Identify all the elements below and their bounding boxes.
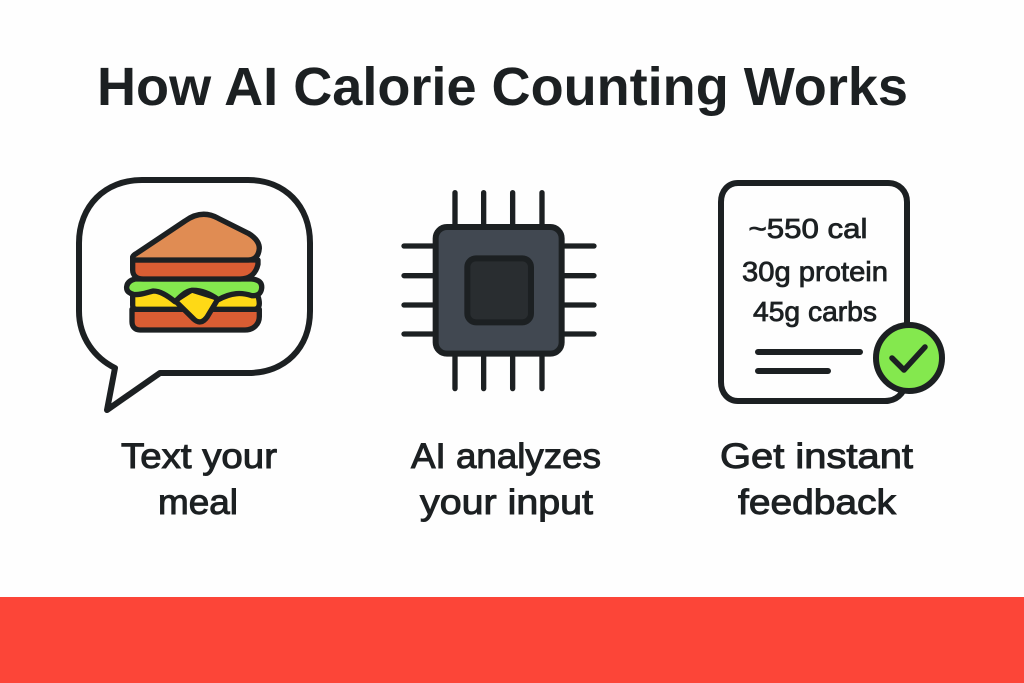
title: How AI Calorie Counting Works xyxy=(97,58,908,117)
nutrition text: 30g protein xyxy=(742,256,888,287)
step 3 label: Get instant xyxy=(720,436,913,476)
cheese drip xyxy=(175,290,218,322)
cheese xyxy=(133,287,259,309)
chip body xyxy=(436,227,562,354)
icon: AI chip xyxy=(404,193,594,389)
step 2 label: your input xyxy=(420,482,593,522)
nutrition text: 45g carbs xyxy=(753,296,877,327)
step 3: instant feedback xyxy=(720,183,942,522)
step 2: AI analyzes xyxy=(404,193,601,522)
chip pins xyxy=(404,193,594,389)
icon: speech bubble xyxy=(79,180,310,410)
document lines xyxy=(758,352,860,371)
red footer band xyxy=(0,597,1024,683)
bottom bread xyxy=(132,309,259,330)
step 1 label: Text your xyxy=(121,436,277,476)
step 2 label: AI analyzes xyxy=(411,436,601,476)
chip core xyxy=(467,258,531,322)
icon: results document xyxy=(721,183,907,401)
middle bread xyxy=(133,260,258,279)
lettuce xyxy=(127,279,262,302)
icon: sandwich xyxy=(127,214,262,330)
nutrition text: ~550 cal xyxy=(748,213,868,244)
step 1 label: meal xyxy=(158,482,238,522)
icon: green check badge xyxy=(876,325,942,391)
step 1: text your meal xyxy=(79,180,310,522)
top bread slice xyxy=(133,214,259,260)
nutrition text xyxy=(742,213,888,327)
step 3 label: feedback xyxy=(738,482,896,522)
